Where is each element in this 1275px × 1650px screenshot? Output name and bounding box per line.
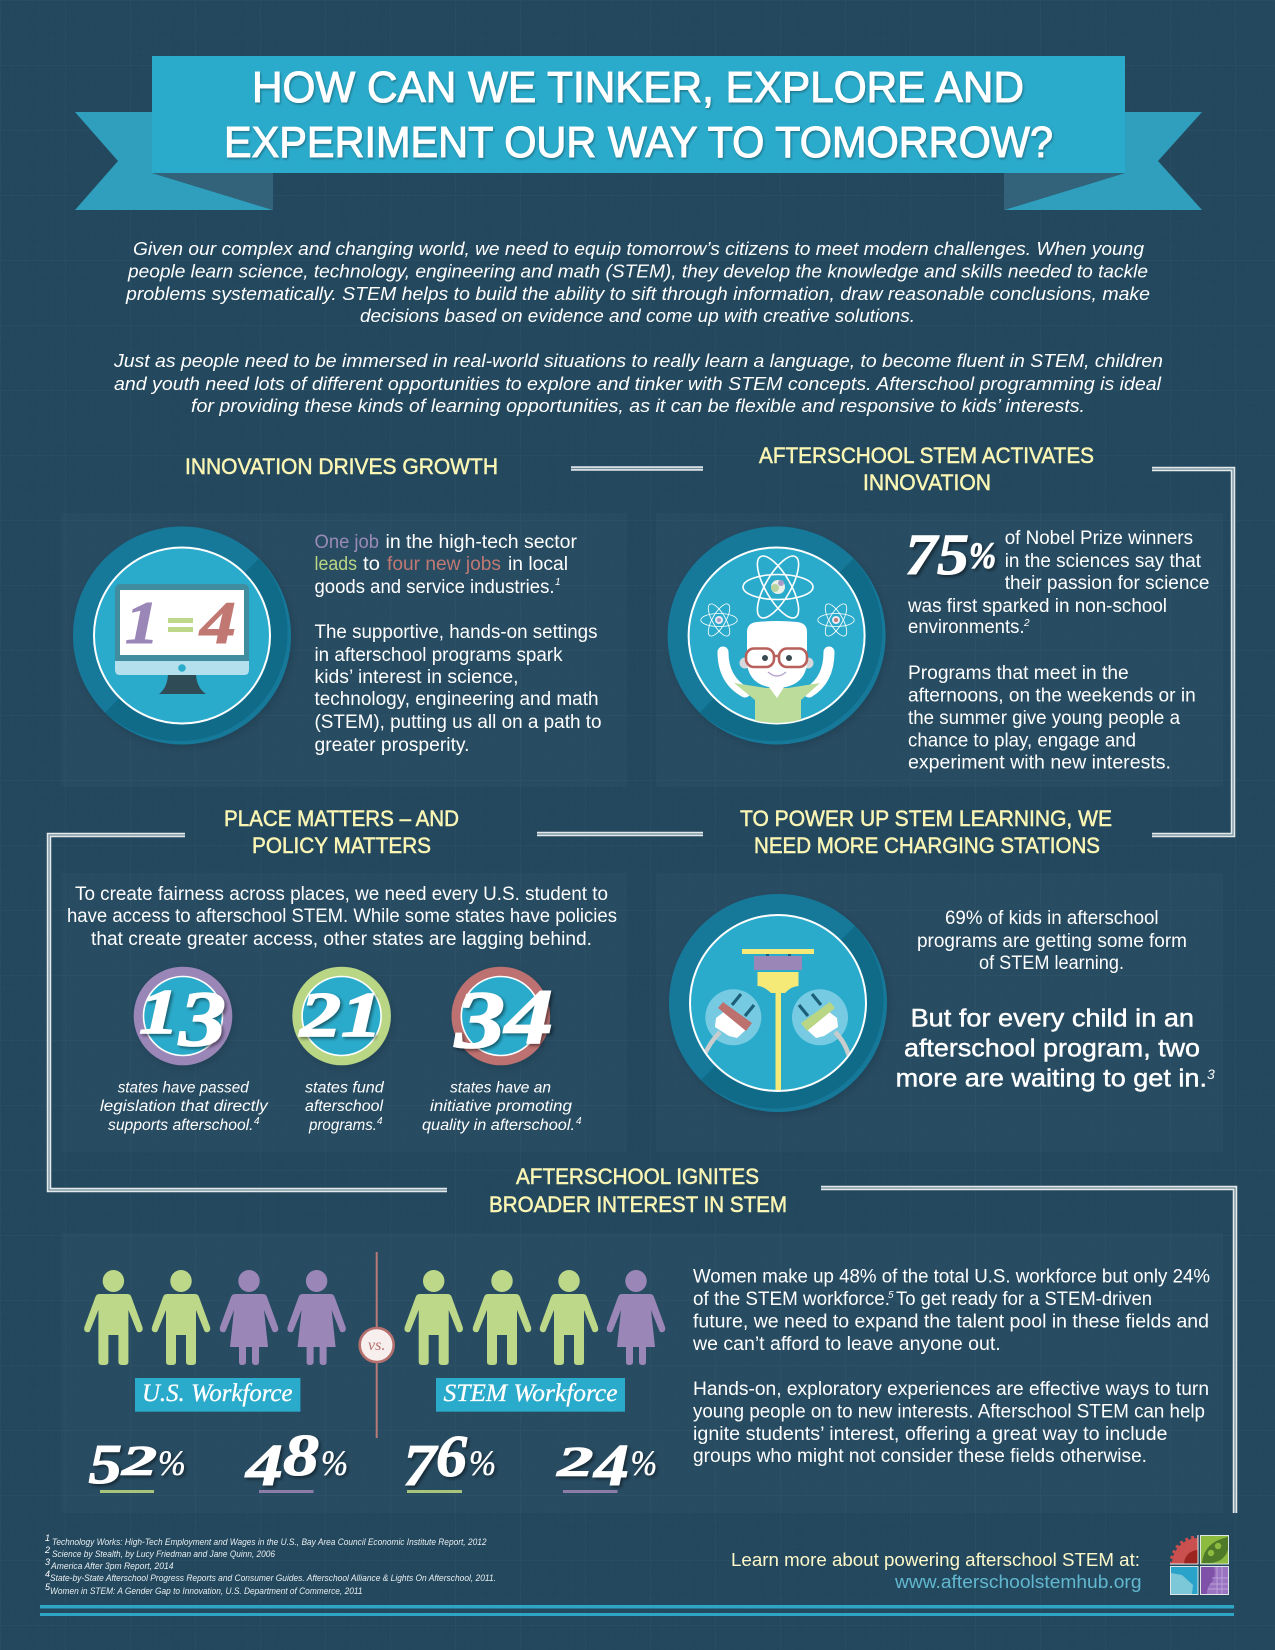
footnotes: Technology Works: High-Tech Employment and Wages in the U.S., Bay Area Council Economic Institute Report, 2012	[52, 1537, 487, 1548]
heading: charging stations	[740, 806, 1112, 858]
stat: 24%: %	[631, 1443, 657, 1483]
heading: afterschool STEM activates innovation	[759, 443, 1094, 495]
text: one job leads to four new jobs: kids’ interest in science,	[314, 667, 518, 688]
heading: afterschool ignites: AFTERSCHOOL IGNITES	[516, 1164, 759, 1189]
text: charging stations: programs are getting some form	[917, 931, 1187, 952]
footnotes	[44, 1533, 496, 1597]
text: charging stations: 3	[1207, 1066, 1215, 1082]
title: EXPERIMENT OUR WAY TO TOMORROW?	[224, 118, 1053, 167]
outlet	[742, 949, 814, 954]
stat: 13 states: legislation that directly	[100, 1098, 269, 1115]
text: 75% of Nobel Prize winners: in the sciences say that	[1005, 551, 1202, 572]
text: charging stations: of STEM learning.	[979, 953, 1124, 974]
pictogram: STEM workforce people	[404, 1270, 665, 1365]
banner body	[152, 56, 1125, 173]
text: women in the workforce: future, we need to expand the talent pool in these fields and	[693, 1312, 1209, 1333]
heading: place matters: PLACE MATTERS – AND	[224, 806, 459, 831]
heading: afterschool ignites	[489, 1164, 787, 1217]
text: one job leads to four new jobs: greater prosperity.	[314, 735, 470, 756]
stat: 52%: 2	[120, 1439, 157, 1485]
footnotes: 1	[45, 1533, 50, 1543]
text: 75% of Nobel Prize winners: experiment with new interests.	[908, 753, 1171, 774]
stat: 48%: 4	[245, 1432, 283, 1498]
text: women in the workforce: groups who might not consider these fields otherwise.	[693, 1446, 1147, 1467]
stat: 52%	[88, 1434, 186, 1496]
title	[224, 63, 1053, 167]
stat: 34 states: states have an	[450, 1080, 551, 1097]
intro text: people learn science, technology, engineering and math (STEM), they develop the knowledge and skills needed to tackle	[127, 260, 1148, 282]
panel: innovation drives growth	[61, 513, 627, 787]
icon: charging plugs	[669, 894, 887, 1112]
stat: 21 states: programs.	[308, 1117, 377, 1134]
text: one job leads to four new jobs: goods and service industries.	[314, 577, 554, 598]
text: charging stations: 69% of kids in afterschool	[945, 908, 1159, 929]
text: one job leads to four new jobs: (STEM), putting us all on a path to	[314, 712, 602, 733]
stat: 21 states: states fund	[305, 1080, 385, 1097]
stat: 24%	[556, 1432, 657, 1498]
stat: 13 states	[100, 967, 269, 1134]
text: women in the workforce	[692, 1267, 1210, 1467]
callout	[896, 1005, 1207, 1093]
heading: innovation drives growth: INNOVATION DRIVES GROWTH	[185, 454, 498, 479]
banner left tail	[75, 112, 273, 210]
stat: 34 states: quality in afterschool.	[422, 1117, 575, 1134]
text: one job leads to four new jobs: leads	[314, 554, 357, 575]
stat: 75%	[905, 522, 996, 587]
text: to create fairness: have access to afterschool STEM. While some states have policies	[67, 906, 617, 927]
text: one job leads to four new jobs: in afterschool programs spark	[314, 645, 563, 666]
panel: broader interest in STEM	[61, 1233, 1223, 1513]
text: 75% of Nobel Prize winners: the summer give young people a	[908, 708, 1180, 729]
heading: afterschool STEM activates innovation: INNOVATION	[863, 470, 991, 495]
title banner	[75, 56, 1202, 210]
stat: 21 states: afterschool	[305, 1098, 384, 1115]
text: women in the workforce: young people on to new interests. Afterschool STEM can help	[693, 1402, 1205, 1423]
intro text: for providing these kinds of learning opportunities, as it can be flexible and responsive to kids’ interests.	[191, 395, 1085, 416]
panel: afterschool STEM activates innovation	[656, 513, 1223, 787]
stat: 76%	[403, 1423, 496, 1498]
stat: 34 states: 4	[576, 1116, 582, 1127]
stat: 52%: 5	[88, 1434, 122, 1496]
text: one job leads to four new jobs: 1	[555, 577, 561, 588]
stat: 24%: 4	[593, 1432, 629, 1498]
text: one job leads to four new jobs: in local	[508, 554, 568, 575]
intro text: problems systematically. STEM helps to build the ability to sift through information, draw reasonable conclusions, make	[125, 283, 1150, 304]
learn more callout: Learn more about powering afterschool STEM at:	[731, 1549, 1140, 1570]
text: women in the workforce: 5	[888, 1290, 894, 1301]
text: one job leads to four new jobs: to	[363, 554, 380, 575]
text: 75% of Nobel Prize winners: was first sparked in non-school	[907, 596, 1167, 617]
label: STEM Workforce: STEM Workforce	[444, 1380, 618, 1407]
learn more callout: www.afterschoolstemhub.org	[894, 1571, 1142, 1592]
learn more callout	[731, 1549, 1142, 1592]
text: 75% of Nobel Prize winners	[905, 522, 1210, 774]
stat: 13 states: 1	[139, 976, 179, 1047]
stat: 13 states: states have passed	[118, 1080, 250, 1097]
intro text: Given our complex and changing world, we need to equip tomorrow’s citizens to meet modern challenges. When young	[133, 238, 1145, 259]
footnotes: State-by-State Afterschool Progress Reports and Consumer Guides. Afterschool Alliance & Lights On Afterschool, 2011.	[50, 1573, 496, 1584]
footnotes: Science by Stealth, by Lucy Friedman and Jane Quinn, 2006	[52, 1549, 276, 1560]
icon: computer monitor 1=4	[73, 526, 291, 744]
stat: 52%: %	[158, 1443, 186, 1483]
panel: place matters	[61, 873, 627, 1152]
text: to create fairness: that create greater access, other states are lagging behind.	[91, 929, 592, 950]
versus divider: vs.	[368, 1337, 385, 1354]
text: to create fairness	[67, 884, 617, 950]
text: 75% of Nobel Prize winners: chance to play, engage and	[908, 731, 1136, 752]
text: 75% of Nobel Prize winners: environments.	[908, 617, 1025, 638]
text: one job leads to four new jobs: in the high-tech sector	[386, 532, 578, 553]
footnotes: 5	[45, 1582, 51, 1592]
text: one job leads to four new jobs: technology, engineering and math	[314, 689, 598, 710]
stat: 21 states: 21	[299, 979, 382, 1050]
text: 75% of Nobel Prize winners: of Nobel Prize winners	[1005, 528, 1193, 549]
text: one job leads to four new jobs: The supportive, hands-on settings	[314, 622, 598, 643]
icon: computer monitor 1=4: 4	[199, 590, 236, 656]
logo	[1170, 1535, 1228, 1594]
icon: scientist with atoms	[668, 526, 886, 744]
stat: 34 states: 3	[454, 974, 505, 1065]
footnotes: America After 3pm Report, 2014	[50, 1561, 174, 1572]
intro text	[113, 238, 1163, 416]
intro text: Just as people need to be immersed in real-world situations to really learn a language, to become fluent in STEM, children	[113, 350, 1163, 371]
intro text: and youth need lots of different opportunities to explore and tinker with STEM concepts. Afterschool programming is ideal	[114, 373, 1162, 394]
stat: 48%: 8	[283, 1422, 319, 1488]
stat: 34 states	[422, 967, 582, 1134]
footnotes: Women in STEM: A Gender Gap to Innovation, U.S. Department of Commerce, 2011	[50, 1586, 362, 1597]
stat: 48%: %	[321, 1443, 348, 1483]
stat: 34 states: 4	[503, 973, 553, 1060]
banner right tail	[1004, 112, 1202, 210]
pictogram: U.S. workforce people	[84, 1270, 346, 1365]
stat: 21 states	[292, 967, 391, 1134]
heading: place matters: POLICY MATTERS	[252, 833, 431, 858]
text: charging stations	[896, 908, 1215, 1093]
heading: charging stations: NEED MORE CHARGING STATIONS	[754, 833, 1100, 858]
callout: But for every child in an	[911, 1005, 1194, 1033]
callout: more are waiting to get in.	[896, 1065, 1207, 1093]
text: one job leads to four new jobs: four new jobs	[387, 554, 501, 575]
stat: 76%: %	[469, 1443, 496, 1483]
stat: 48%	[245, 1422, 348, 1498]
stat: 24%: 2	[556, 1440, 593, 1486]
heading: place matters	[224, 806, 459, 858]
connector lines	[49, 468, 1235, 1513]
footer rules	[40, 1605, 1234, 1616]
intro text: decisions based on evidence and come up with creative solutions.	[360, 305, 915, 326]
text: women in the workforce: Hands-on, exploratory experiences are effective ways to turn	[693, 1379, 1209, 1400]
heading: charging stations: TO POWER UP STEM LEARNING, WE	[740, 806, 1112, 831]
text: to create fairness: To create fairness across places, we need every U.S. student to	[75, 884, 608, 905]
heading: afterschool ignites: BROADER INTEREST IN STEM	[489, 1192, 787, 1217]
text: 75% of Nobel Prize winners: afternoons, on the weekends or in	[908, 686, 1196, 707]
stat: 75%: 75	[905, 522, 969, 587]
text: 75% of Nobel Prize winners: their passion for science	[1005, 573, 1210, 594]
text: women in the workforce: To get ready for a STEM-driven	[896, 1289, 1152, 1310]
label: U.S. Workforce: U.S. Workforce	[142, 1380, 292, 1407]
stat: 13 states: supports afterschool.	[108, 1117, 254, 1134]
stat: 13 states: 4	[254, 1116, 260, 1127]
stat: 76%: 7	[403, 1432, 439, 1498]
text: women in the workforce: ignite students’ interest, offering a great way to include	[693, 1424, 1168, 1445]
text: 75% of Nobel Prize winners: 2	[1023, 618, 1030, 629]
stat: 76%: 6	[436, 1423, 468, 1489]
text: one job leads to four new jobs	[314, 532, 602, 756]
icon: computer monitor 1=4: 1	[125, 590, 159, 656]
footnotes: 4	[45, 1569, 50, 1579]
panel: charging stations	[656, 873, 1223, 1152]
banner folds	[152, 173, 1125, 210]
footnotes: 2	[44, 1545, 50, 1555]
stat: 13 states: 3	[178, 975, 226, 1062]
text: women in the workforce: Women make up 48% of the total U.S. workforce but only 24%	[693, 1267, 1210, 1288]
versus divider	[360, 1252, 394, 1438]
stat: 34 states: initiative promoting	[430, 1098, 572, 1115]
stat: 21 states: 4	[377, 1116, 383, 1127]
title: HOW CAN WE TINKER, EXPLORE AND	[252, 63, 1024, 112]
text: one job leads to four new jobs: One job	[314, 532, 379, 553]
stat: 75%: %	[969, 536, 996, 577]
heading: afterschool STEM activates innovation: AFTERSCHOOL STEM ACTIVATES	[759, 443, 1094, 468]
callout: afterschool program, two	[904, 1035, 1200, 1063]
text: women in the workforce: of the STEM workforce.	[693, 1289, 890, 1310]
text: 75% of Nobel Prize winners: Programs that meet in the	[908, 663, 1129, 684]
footnotes: 3	[45, 1557, 50, 1567]
text: women in the workforce: we can’t afford to leave anyone out.	[692, 1334, 1001, 1355]
